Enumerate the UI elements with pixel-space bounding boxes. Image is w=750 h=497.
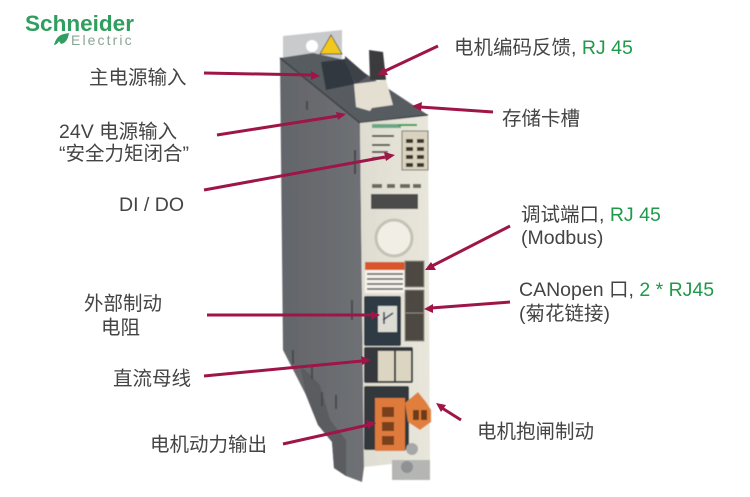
label: CANopen port: (菊花链接): [519, 303, 610, 325]
label: motor power output: 电机动力输出: [150, 434, 267, 456]
DC bus panel: [364, 347, 413, 383]
label: 24V input: [59, 121, 189, 165]
arrow: 24V input: [217, 112, 346, 135]
label: CANopen port: [519, 279, 714, 325]
label: external brake resistor: [84, 293, 162, 339]
RJ45 debug port: [405, 261, 424, 287]
label: DI/DO: DI / DO: [119, 194, 184, 216]
side slots: [293, 101, 355, 409]
logo: Schneider Electric: [25, 11, 134, 48]
top surface edge: [280, 58, 428, 123]
label: motor brake: 电机抱闸制动: [477, 421, 594, 443]
arrow: main power: [204, 71, 320, 80]
bottom screw: [406, 443, 418, 455]
label: external brake resistor: 电阻: [101, 317, 140, 339]
arrow: CANopen: [424, 302, 510, 313]
arrow: DC bus: [204, 356, 371, 376]
arrow: motor power: [283, 420, 376, 444]
front panel: [360, 116, 430, 467]
arrow: brake resistor: [207, 311, 380, 320]
label: memory card slot: 存储卡槽: [502, 108, 580, 130]
label: 24V input: “安全力矩闭合”: [59, 143, 189, 165]
arrow: debug port: [425, 226, 510, 270]
orange motor power connector: [375, 398, 405, 451]
label: debug port: 调试端口, RJ 45: [521, 204, 661, 226]
icon: logo leaf: [54, 33, 69, 45]
terminal: main power: [321, 59, 355, 90]
arrow: DI/DO: [204, 152, 395, 190]
label: CANopen port: CANopen 口, 2 * RJ45: [519, 279, 714, 301]
status markers: [372, 184, 421, 188]
label: main power input: 主电源输入: [89, 67, 187, 89]
logo: Schneider Electric: Schneider: [25, 11, 134, 36]
device: servo drive: [280, 30, 431, 482]
label: 24V input: 24V 电源输入: [59, 121, 177, 143]
front brand mark: [372, 124, 401, 128]
arrow: encoder feedback: [377, 46, 438, 75]
label: external brake resistor: 外部制动: [84, 293, 162, 315]
panel small print: [372, 136, 394, 158]
brake resistor panel: [364, 296, 401, 346]
dial: [376, 220, 412, 256]
arrows: [204, 46, 510, 444]
label: DC bus: 直流母线: [113, 368, 191, 390]
top surface: [280, 53, 428, 123]
danger label: [365, 262, 406, 270]
mounting bracket: [283, 30, 342, 62]
icon: warning label: [320, 35, 342, 54]
label: debug port: [521, 204, 661, 249]
motor output panel: [364, 386, 409, 450]
arrow: motor brake: [436, 403, 461, 420]
orange brake connector: [405, 392, 431, 430]
connector: encoder feedback: [369, 50, 386, 80]
label: debug port: (Modbus): [521, 227, 603, 249]
side panel: [280, 58, 364, 482]
label: motor encoder feedback: 电机编码反馈, RJ 45: [454, 37, 633, 59]
connector: DI/DO: [402, 131, 428, 170]
connector: 24V white plug: [354, 80, 393, 111]
RJ45 CANopen ports: [405, 290, 424, 318]
logo: Schneider Electric: Electric: [71, 32, 134, 48]
LED display: [371, 194, 418, 209]
arrow: memory card: [412, 102, 493, 112]
